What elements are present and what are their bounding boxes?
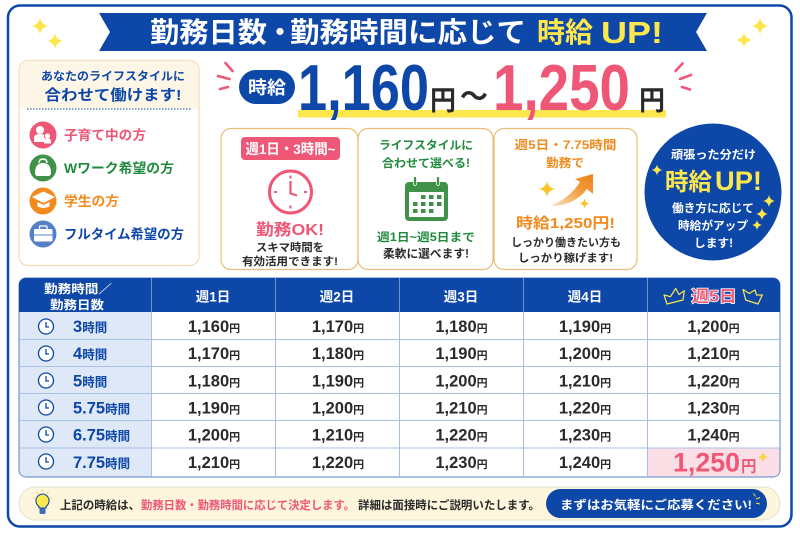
table values: 1,190円 xyxy=(188,400,240,418)
callout: wage up circle: 時給 xyxy=(665,169,712,196)
price headline: 円 xyxy=(639,86,665,116)
title ribbon: 勤務日数 xyxy=(150,17,267,48)
table values: 1,200円 xyxy=(312,400,364,418)
table values: 1,180円 xyxy=(435,318,488,336)
item: full time xyxy=(30,220,184,248)
card: flexible: ライフスタイルに xyxy=(379,139,473,152)
table values: 1,210円 xyxy=(312,426,364,444)
table header: 週4日 xyxy=(568,290,602,304)
card: full week: 時給1,250円! xyxy=(516,215,615,232)
table values xyxy=(188,318,740,472)
row labels xyxy=(38,318,130,472)
table values: 1,220円 xyxy=(435,426,488,444)
table header: 週5日 xyxy=(692,288,736,306)
burst left xyxy=(218,63,232,89)
icon: calendar xyxy=(405,176,448,221)
footer note: 上記の時給は、 xyxy=(60,498,140,512)
card: one day: 有効活用できます! xyxy=(242,254,338,268)
call to action xyxy=(546,489,767,518)
callout: wage up circle: 時給がアップ xyxy=(678,218,749,232)
title ribbon: 時給 xyxy=(537,17,593,48)
card: one day xyxy=(221,128,358,270)
title ribbon: ・ xyxy=(266,17,294,48)
footer note: 勤務日数・勤務時間に応じて決定します。 xyxy=(141,498,355,512)
footer note xyxy=(19,487,780,520)
item: childcare: 子育て中の方 xyxy=(64,127,146,143)
price headline: 〜 xyxy=(460,81,488,112)
item: double work xyxy=(30,154,174,182)
title ribbon: 勤務時間に応じて xyxy=(290,17,526,48)
table values: 1,210円 xyxy=(188,454,240,472)
table values: 1,170円 xyxy=(312,318,364,336)
callout: wage up circle xyxy=(644,124,782,260)
table header: 週1日 xyxy=(196,290,230,304)
table values: 1,240円 xyxy=(559,454,611,472)
callout: wage up circle: 働き方に応じて xyxy=(672,201,754,215)
table values: 1,190円 xyxy=(312,372,364,390)
panel: lifestyle: あなたのライフスタイルに xyxy=(41,70,185,83)
card: full week xyxy=(494,128,637,270)
card: full week: 勤務で xyxy=(546,155,584,170)
item: double work: Wワーク希望の方 xyxy=(64,160,174,176)
row labels: 4時間 xyxy=(73,345,107,363)
price headline xyxy=(239,51,666,124)
table values: 1,210円 xyxy=(559,372,611,390)
card: flexible: 合わせて選べる! xyxy=(382,156,470,170)
icon: light bulb xyxy=(33,490,52,514)
table values: 1,230円 xyxy=(687,400,740,418)
price headline: 円 xyxy=(430,86,456,116)
row labels: 7.75時間 xyxy=(73,454,130,472)
table values: 1,210円 xyxy=(435,400,488,418)
table values: 1,230円 xyxy=(435,454,488,472)
row labels: 6.75時間 xyxy=(73,426,130,444)
item: childcare xyxy=(30,122,146,148)
item: student xyxy=(30,188,119,214)
price headline: 1,160 xyxy=(298,51,429,124)
table values: 1,230円 xyxy=(559,426,611,444)
callout: wage up circle: UP! xyxy=(715,166,762,196)
table values: 1,220円 xyxy=(312,454,364,472)
card: full week: 週5日・7.75時間 xyxy=(514,137,616,152)
sparkles left xyxy=(32,18,63,49)
call to action: まずはお気軽にご応募ください! xyxy=(560,497,752,512)
card: full week: しっかり働きたい方も xyxy=(511,235,621,249)
title ribbon: UP! xyxy=(601,15,663,50)
table values: 1,160円 xyxy=(188,318,240,336)
card: flexible: 週1日~週5日まで xyxy=(377,230,475,244)
wage table xyxy=(19,278,780,478)
table values: 1,190円 xyxy=(559,318,611,336)
table header: 勤務時間／ xyxy=(44,281,112,296)
table header: 勤務日数 xyxy=(50,297,104,312)
icon: clock xyxy=(270,171,312,213)
table values: 1,180円 xyxy=(312,345,364,363)
title ribbon xyxy=(99,13,707,51)
callout: wage up circle: します! xyxy=(694,237,733,250)
table header: 週3日 xyxy=(444,290,478,304)
pay label xyxy=(239,70,295,104)
table header xyxy=(44,281,762,312)
table values: 1,200円 xyxy=(687,318,740,336)
sparkles right xyxy=(736,18,768,48)
table values: 1,200円 xyxy=(188,426,240,444)
card: flexible xyxy=(358,128,493,270)
table values: 1,210円 xyxy=(687,345,740,363)
panel: lifestyle xyxy=(19,60,199,266)
table header: 週2日 xyxy=(320,290,354,304)
table values: 1,200円 xyxy=(435,372,488,390)
table values: 1,220円 xyxy=(687,372,740,390)
highlighted wage: 円 xyxy=(741,458,757,476)
price headline: 1,250 xyxy=(493,51,630,124)
icon: up arrow xyxy=(539,174,593,208)
row labels: 5.75時間 xyxy=(73,400,130,418)
table values: 1,240円 xyxy=(687,426,740,444)
panel: lifestyle: 合わせて働けます! xyxy=(44,87,182,104)
table values: 1,170円 xyxy=(188,345,240,363)
card: flexible: 柔軟に選べます! xyxy=(383,246,469,260)
card: one day: 勤務OK! xyxy=(256,220,324,239)
table values: 1,190円 xyxy=(435,345,488,363)
table values: 1,180円 xyxy=(188,372,240,390)
item: student: 学生の方 xyxy=(64,193,119,209)
row labels: 3時間 xyxy=(73,318,107,336)
card: one day: スキマ時間を xyxy=(256,240,324,254)
burst right xyxy=(676,64,691,90)
card: one day: 週1日・3時間~ xyxy=(246,141,336,157)
pay label: 時給 xyxy=(248,78,286,98)
highlighted wage: 1,250 xyxy=(673,448,740,478)
footer note: 詳細は面接時にご説明いたします。 xyxy=(358,498,540,512)
item: full time: フルタイム希望の方 xyxy=(64,226,184,242)
table values: 1,200円 xyxy=(559,345,611,363)
card: full week: しっかり稼げます! xyxy=(518,250,613,264)
callout: wage up circle: 頑張った分だけ xyxy=(671,148,756,162)
row labels: 5時間 xyxy=(73,372,107,390)
table values: 1,220円 xyxy=(559,400,611,418)
